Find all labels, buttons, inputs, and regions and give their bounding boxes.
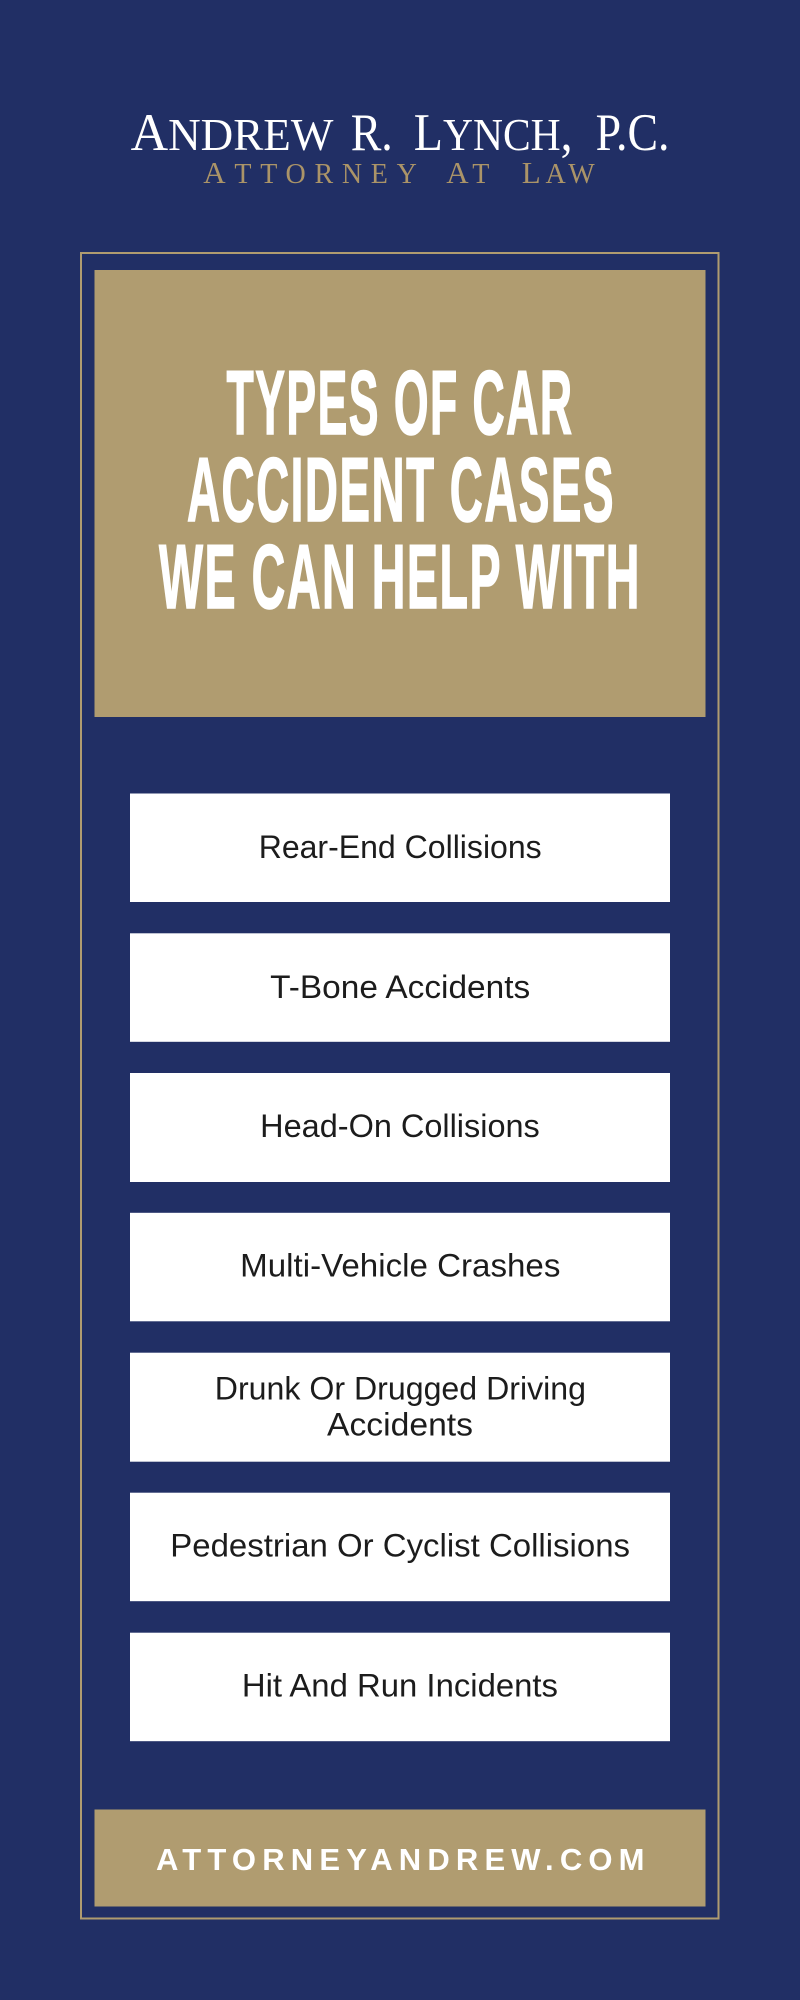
website url: ATTORNEYANDREW.COM (156, 1842, 644, 1877)
item: head-on collisions (130, 1073, 670, 1182)
item: drunk or drugged driving accidents: Drunk Or Drugged Driving (215, 1370, 586, 1406)
list of accident types (130, 794, 670, 1741)
item: t-bone accidents (130, 933, 670, 1042)
item: rear-end collisions: Rear-End Collisions (259, 829, 542, 865)
tagline (203, 155, 595, 190)
logo: firm name and tagline (131, 104, 670, 190)
tagline: A TTORNEY (203, 155, 417, 190)
item: multi-vehicle crashes (130, 1213, 670, 1321)
item: multi-vehicle crashes: Multi-Vehicle Crashes (240, 1248, 560, 1284)
item: t-bone accidents: T-Bone Accidents (270, 969, 530, 1005)
tagline: AT (446, 155, 489, 190)
outer frame (81, 253, 718, 1918)
panel: title (94, 270, 706, 717)
item: rear-end collisions (130, 794, 670, 902)
firm name: P.C. (596, 104, 670, 162)
tagline: LAW (522, 155, 595, 190)
firm name: R. (351, 104, 393, 162)
item: hit and run incidents (130, 1633, 670, 1741)
item: hit and run incidents: Hit And Run Incidents (242, 1668, 558, 1704)
item: pedestrian or cyclist collisions (130, 1493, 670, 1601)
item: pedestrian or cyclist collisions: Pedestrian Or Cyclist Collisions (170, 1528, 630, 1564)
item: head-on collisions: Head-On Collisions (260, 1108, 540, 1144)
firm name: ANDREW (131, 104, 334, 162)
item: drunk or drugged driving accidents (130, 1353, 670, 1462)
heading (159, 353, 641, 628)
item: drunk or drugged driving accidents: Accidents (327, 1407, 473, 1443)
firm name (131, 104, 670, 162)
firm name: LYNCH, (414, 104, 573, 162)
footer banner (94, 1810, 706, 1906)
